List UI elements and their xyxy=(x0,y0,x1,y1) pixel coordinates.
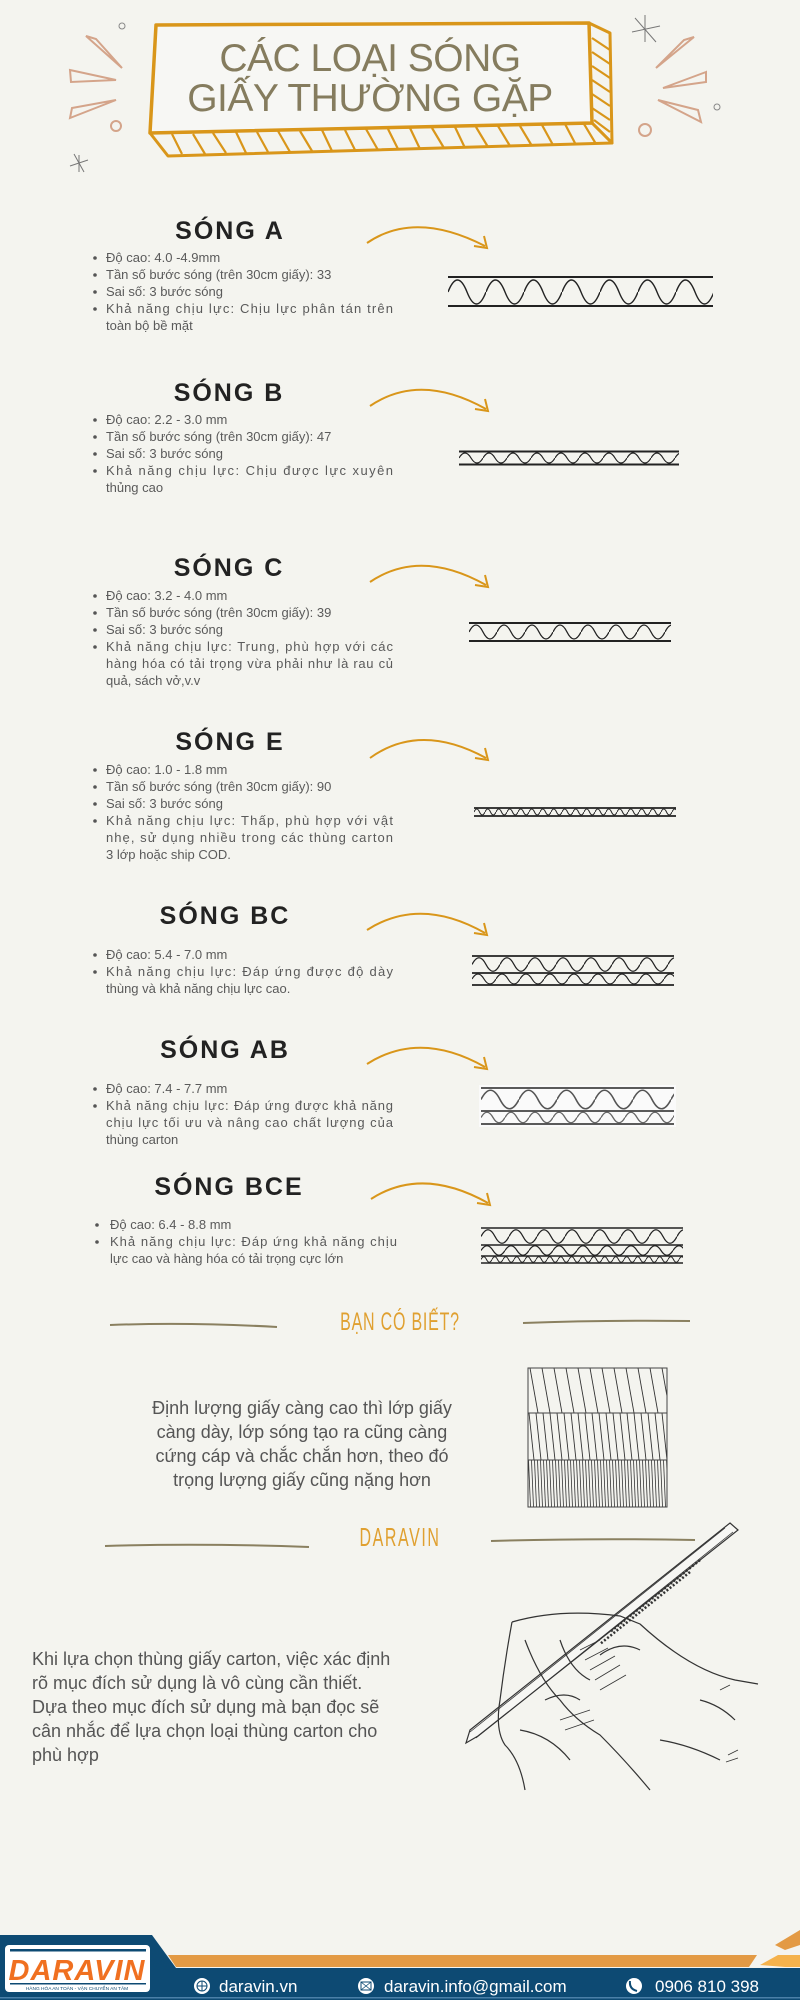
bullet list: Khả năng chịu lực: Chịu lực phân tán trên xyxy=(106,301,393,316)
logo xyxy=(5,1945,150,1992)
bullet list: lực cao và hàng hóa có tải trọng cực lớn xyxy=(110,1251,343,1266)
paragraph: did you know: trọng lượng giấy cũng nặng hơn xyxy=(173,1470,431,1490)
diagram: flute BC xyxy=(472,956,674,985)
bullet list: Độ cao: 1.0 - 1.8 mm xyxy=(106,762,227,777)
bullet list: Sai số: 3 bước sóng xyxy=(106,622,223,637)
bullet list: Sai số: 3 bước sóng xyxy=(106,284,223,299)
section: Sóng E xyxy=(93,726,676,862)
bullet list: 3 lớp hoặc ship COD. xyxy=(106,847,231,862)
bullet list: quả, sách vở,v.v xyxy=(106,673,201,688)
heading: SÓNG A xyxy=(175,215,285,245)
heading: SÓNG BCE xyxy=(154,1171,304,1201)
paragraph: conclusion: phù hợp xyxy=(32,1745,99,1765)
paragraph: conclusion: Dựa theo mục đích sử dụng mà bạn đọc sẽ xyxy=(32,1697,379,1717)
bullet list: Độ cao: 2.2 - 3.0 mm xyxy=(106,412,227,427)
title banner xyxy=(70,15,720,172)
bullet list: Khả năng chịu lực: Trung, phù hợp với các xyxy=(106,639,394,654)
bullet list: Độ cao: 7.4 - 7.7 mm xyxy=(106,1081,227,1096)
bullet list: Khả năng chịu lực: Chịu được lực xuyên xyxy=(106,463,393,478)
arrow xyxy=(367,914,487,935)
illustration: hand holding pencil xyxy=(466,1523,758,1790)
diagram: flute A xyxy=(448,277,713,307)
arrow xyxy=(370,390,488,411)
arrow xyxy=(371,1183,490,1205)
bullet list: Độ cao: 4.0 -4.9mm xyxy=(106,250,220,265)
arrow xyxy=(370,566,488,587)
illustration: hatched paper weights xyxy=(528,1368,667,1507)
heading: SÓNG E xyxy=(175,726,285,756)
paragraph: conclusion: Khi lựa chọn thùng giấy carton, việc xác định xyxy=(32,1649,390,1669)
bullet list: Khả năng chịu lực: Đáp ứng được độ dày xyxy=(106,964,394,979)
paragraph: did you know: Định lượng giấy càng cao thì lớp giấy xyxy=(152,1398,452,1418)
bullet list: Sai số: 3 bước sóng xyxy=(106,446,223,461)
paragraph: conclusion: rõ mục đích sử dụng là vô cùng cần thiết. xyxy=(32,1673,362,1693)
contact: website: daravin.vn xyxy=(219,1977,297,1996)
footer xyxy=(0,1930,800,2000)
bullet list: chịu lực tối ưu và nâng cao chất lượng của xyxy=(106,1115,394,1130)
heading: SÓNG B xyxy=(174,377,284,407)
heading: SÓNG AB xyxy=(160,1034,290,1064)
contact: phone: 0906 810 398 xyxy=(655,1977,759,1996)
bullet list: Khả năng chịu lực: Đáp ứng được khả năng xyxy=(106,1098,393,1113)
bullet list: Tần số bước sóng (trên 30cm giấy): 39 xyxy=(106,605,331,620)
divider heading: Daravin: DARAVIN xyxy=(359,1522,441,1552)
arrow xyxy=(370,740,488,760)
paragraph: did you know: càng dày, lớp sóng tạo ra cũng càng xyxy=(157,1422,447,1442)
diagram: flute AB xyxy=(479,1085,676,1127)
logo: DARAVIN xyxy=(9,1955,146,1987)
paragraph: did you know: cứng cáp và chắc chắn hơn, theo đó xyxy=(155,1445,449,1466)
title text: CÁC LOẠI SÓNG xyxy=(219,37,521,80)
section: Sóng A xyxy=(93,215,713,333)
diagram: flute E xyxy=(474,808,676,816)
section: Sóng BCE xyxy=(95,1171,683,1266)
paragraph: conclusion: cân nhắc để lựa chọn loại thùng carton cho xyxy=(32,1720,377,1741)
bullet list: Độ cao: 6.4 - 8.8 mm xyxy=(110,1217,231,1232)
bullet list: Khả năng chịu lực: Thấp, phù hợp với vật xyxy=(106,813,393,828)
diagram: flute B xyxy=(459,452,679,464)
bullet list: Sai số: 3 bước sóng xyxy=(106,796,223,811)
bullet list xyxy=(95,1217,397,1266)
diagram: flute C xyxy=(469,623,671,641)
bullet list xyxy=(93,250,393,333)
bullet list xyxy=(93,762,393,862)
bullet list: hàng hóa có tải trọng vừa phải như là rau củ xyxy=(106,656,393,671)
bullet list: nhẹ, sử dụng nhiều trong các thùng carton xyxy=(106,830,393,845)
paragraph: conclusion xyxy=(32,1649,390,1765)
section: Sóng B xyxy=(93,377,679,495)
arrow xyxy=(367,227,487,248)
bullet list xyxy=(93,947,393,996)
divider heading: Bạn có biết xyxy=(110,1309,690,1336)
divider heading: Daravin xyxy=(105,1522,695,1552)
divider heading: Bạn có biết: BẠN CÓ BIẾT? xyxy=(340,1309,460,1336)
title banner: GIẤY THƯỜNG GẶP xyxy=(187,76,553,120)
bullet list: thùng carton xyxy=(106,1132,178,1147)
bullet list: Khả năng chịu lực: Đáp ứng khả năng chịu xyxy=(110,1234,397,1249)
bullet list: Tần số bước sóng (trên 30cm giấy): 47 xyxy=(106,429,331,444)
heading: SÓNG C xyxy=(174,552,284,582)
bullet list: Tần số bước sóng (trên 30cm giấy): 90 xyxy=(106,779,331,794)
bullet list: toàn bộ bề mặt xyxy=(106,318,193,333)
section: Sóng BC xyxy=(93,900,674,996)
arrow xyxy=(367,1048,487,1069)
box: front face xyxy=(150,23,592,133)
box: side and bottom faces xyxy=(150,23,612,156)
bullet list: Độ cao: 5.4 - 7.0 mm xyxy=(106,947,227,962)
heading: SÓNG BC xyxy=(160,900,290,930)
decoration: left sparkles xyxy=(70,23,125,172)
bullet list: Tần số bước sóng (trên 30cm giấy): 33 xyxy=(106,267,331,282)
bullet list: thùng và khả năng chịu lực cao. xyxy=(106,981,290,996)
bullet list xyxy=(93,412,393,495)
logo: HÀNG HÓA AN TOÀN - VẬN CHUYỂN AN TÂM xyxy=(26,1985,128,1992)
section: Sóng AB xyxy=(93,1034,676,1147)
bullet list xyxy=(93,1081,394,1147)
bullet list: thủng cao xyxy=(106,480,163,495)
bullet list: Độ cao: 3.2 - 4.0 mm xyxy=(106,588,227,603)
diagram: flute BCE xyxy=(481,1228,683,1263)
bullet list xyxy=(93,588,393,688)
decoration: right sparkles xyxy=(632,15,720,136)
contact: email: daravin.info@gmail.com xyxy=(384,1977,567,1996)
paragraph: did you know xyxy=(152,1398,452,1490)
section: Sóng C xyxy=(93,552,671,688)
